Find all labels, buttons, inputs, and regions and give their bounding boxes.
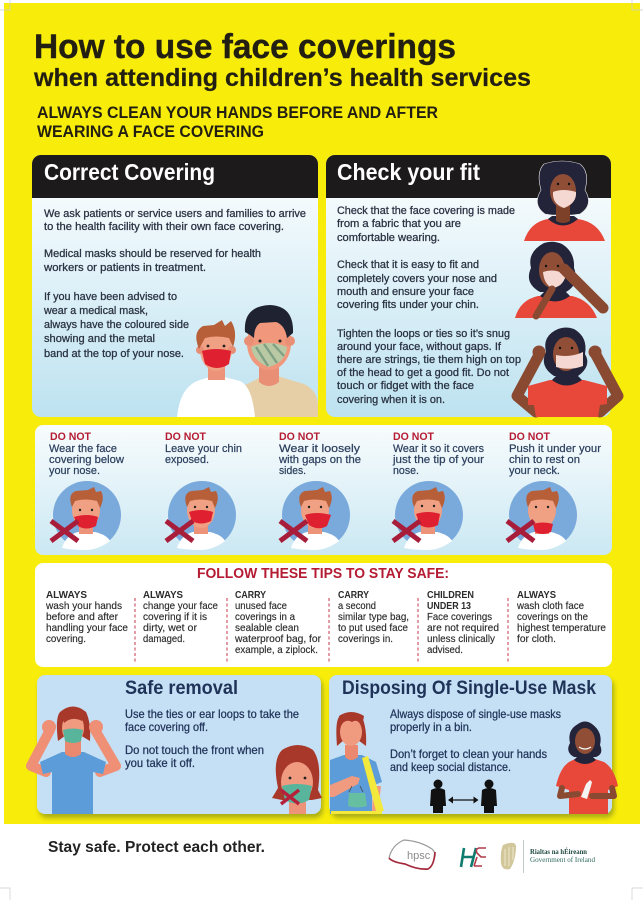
panel header: check your fit [326,155,611,198]
tip 5 [427,590,499,656]
text: check your fit: there are strings, tie them high on top [337,354,521,366]
icon: woman wearing mask [524,161,605,241]
text: check your fit: mouth and ensure your face [337,286,474,298]
tip 2: ALWAYS [143,590,183,601]
tip 5: unless clinically [427,634,496,645]
subtitle: ALWAYS CLEAN YOUR HANDS BEFORE AND AFTER [37,104,438,122]
icon: woman removing mask [31,706,116,814]
do not 3: sides. [279,465,306,477]
do not 3 [278,431,361,477]
text: correct covering [43,208,306,360]
tip 4: to put used face [338,623,408,634]
subtitle: WEARING A FACE COVERING [37,123,264,141]
tip 6: wash cloth face [516,601,584,612]
do not 1: your nose. [49,465,100,477]
logo: hpsc: hpsc [407,850,431,862]
tip 1: ALWAYS [46,590,87,601]
do not 3: with gaps on the [278,454,361,466]
text: check your fit: from a fabric that you are [337,218,461,230]
panel: correct covering [32,155,318,417]
logo: HSE [461,848,486,867]
logo: Government of Ireland [501,840,595,873]
text: disposing: properly in a bin. [390,721,472,734]
tip 5: CHILDREN [427,590,474,601]
tip 2: change your face [143,601,218,612]
do not 5 [509,431,601,477]
tip 3: example, a ziplock. [235,645,318,656]
tip 4: CARRY [338,590,369,601]
do not 5: chin to rest on [509,454,580,466]
text: safe removal: Do not touch the front when [125,744,264,757]
tip 5: advised. [427,645,463,656]
icon: mask covering nose tip [393,481,463,550]
icon: mask under chin [507,481,577,550]
tip 3: coverings in a [235,612,295,623]
text: correct covering: to the health facility with their own face covering. [44,221,284,233]
text: check your fit: around your face, without gaps. If [337,341,502,353]
tip 4: a second [338,601,376,612]
text: disposing [390,708,561,774]
panel: do not [35,425,612,555]
text: check your fit: completely covers your nose and [337,273,497,285]
text: check your fit: comfortable wearing. [337,232,440,244]
icon: man with striped mask [244,305,318,417]
tip 5: Face coverings [427,612,492,623]
do not 2 [165,431,242,466]
logo: Government of Ireland: Rialtas na hÉireann [530,846,588,856]
text: disposing: Don’t forget to clean your hands [390,748,547,761]
panel: disposing of single-use mask [329,675,618,818]
text: check your fit: of the head to get a good fit. Do not [337,367,510,379]
icon: woman with hand sanitiser [556,722,618,814]
panel: safe removal [31,675,323,818]
panel header: correct covering [32,155,318,198]
icon: woman touching mask crossed out [272,745,322,814]
tip 6: ALWAYS [517,590,556,601]
text: check your fit: Tighten the loops or ties so it’s snug [337,328,510,340]
do not 5: your neck. [509,465,560,477]
icon: social distance figures [430,780,497,813]
text: correct covering: If you have been advised to [44,291,177,303]
logo: Government of Ireland: Government of Ireland [530,855,595,864]
tip 1 [45,590,128,645]
text: correct covering: wear a medical mask, [43,305,148,317]
title: How to use face coverings [34,28,456,66]
text: correct covering: workers or patients in treatment. [43,262,206,274]
do not 1: DO NOT [50,431,91,443]
do not 2: DO NOT [165,431,206,443]
do not 4: just the tip of your [392,454,484,466]
text: check your fit: Check that the face covering is made [337,205,515,217]
text: correct covering: Medical masks should be reserved for health [44,248,261,260]
tip 4: similar type bag, [338,612,409,623]
tip 5: are not required [427,623,499,634]
icon: mask below nose [51,481,121,550]
text: disposing: Always dispose of single-use masks [390,708,561,721]
do not 3: Wear it loosely [279,443,360,455]
title: when attending children’s health services [33,64,531,92]
tips heading: FOLLOW THESE TIPS TO STAY SAFE: [197,566,449,582]
icon: boy with red mask [177,320,255,417]
do not 1: covering below [49,454,125,466]
safe removal heading: Safe removal [125,678,238,699]
do not 5: DO NOT [509,431,550,443]
tip 3: sealable clean [235,623,299,634]
tip 3: unused face [235,601,287,612]
tip 1: handling your face [46,623,128,634]
tip 6 [516,590,606,645]
text: check your fit: touch or fidget with the face [337,380,474,392]
text: safe removal: face covering off. [125,721,208,734]
icon: woman with mask bag [330,712,384,814]
tip 2 [143,590,218,645]
do not 4: DO NOT [393,431,434,443]
do not 2: Leave your chin [165,443,242,455]
tip 1: before and after [46,612,119,623]
tip 6: coverings on the [517,612,588,623]
icon: loose mask [280,481,350,550]
icon: woman tightening loops [517,328,618,417]
tip 2: dirty, wet or [143,623,198,634]
text: safe removal: Use the ties or ear loops to take the [125,708,299,721]
do not 5: Push it under your [509,443,601,455]
text: correct covering: We ask patients or service users and families to arrive [44,208,306,220]
text: disposing: and keep social distance. [390,761,511,774]
icon: woman adjusting mask [515,242,603,318]
panel: tips [35,563,612,667]
do not 1 [49,431,125,477]
icon: chin exposed [166,481,236,550]
disposing heading: Disposing Of Single-Use Mask [342,678,596,699]
tip 6: highest temperature [517,623,606,634]
panel header: check your fit: Check your fit [337,159,480,185]
footer tagline: Stay safe. Protect each other. [48,839,265,856]
text: check your fit: covering when it is on. [337,394,445,406]
do not 4: nose. [393,465,419,477]
tip 3 [234,590,322,656]
tip 3: CARRY [235,590,266,601]
tip 2: covering if it is [143,612,207,623]
panel: check your fit [326,155,618,417]
text: safe removal [125,708,299,770]
subtitle [37,104,438,141]
do not 4: Wear it so it covers [393,443,484,455]
tip 1: wash your hands [45,601,122,612]
text: safe removal: you take it off. [125,757,195,770]
text: correct covering: band at the top of your nose. [44,348,184,360]
tip 6: for cloth. [517,634,556,645]
logo: hpsc [389,840,435,869]
do not 1: Wear the face [49,443,117,455]
text: correct covering: showing and the metal [44,333,155,345]
text: correct covering: always have the coloured side [44,319,189,331]
tip 3: waterproof bag, for [234,634,322,645]
title [33,28,531,92]
tip 4: coverings in. [338,634,393,645]
text: check your fit [337,205,521,406]
panel header: correct covering: Correct Covering [44,159,215,185]
tip 2: damaged. [143,634,185,645]
text: check your fit: Check that it is easy to fit and [337,259,479,271]
text: check your fit: covering fits under your chin. [337,299,479,311]
do not 4 [392,431,484,477]
do not 3: DO NOT [279,431,320,443]
tip 5: UNDER 13 [427,601,471,612]
tip 4 [338,590,409,645]
tip 1: covering. [46,634,86,645]
do not 2: exposed. [165,454,209,466]
